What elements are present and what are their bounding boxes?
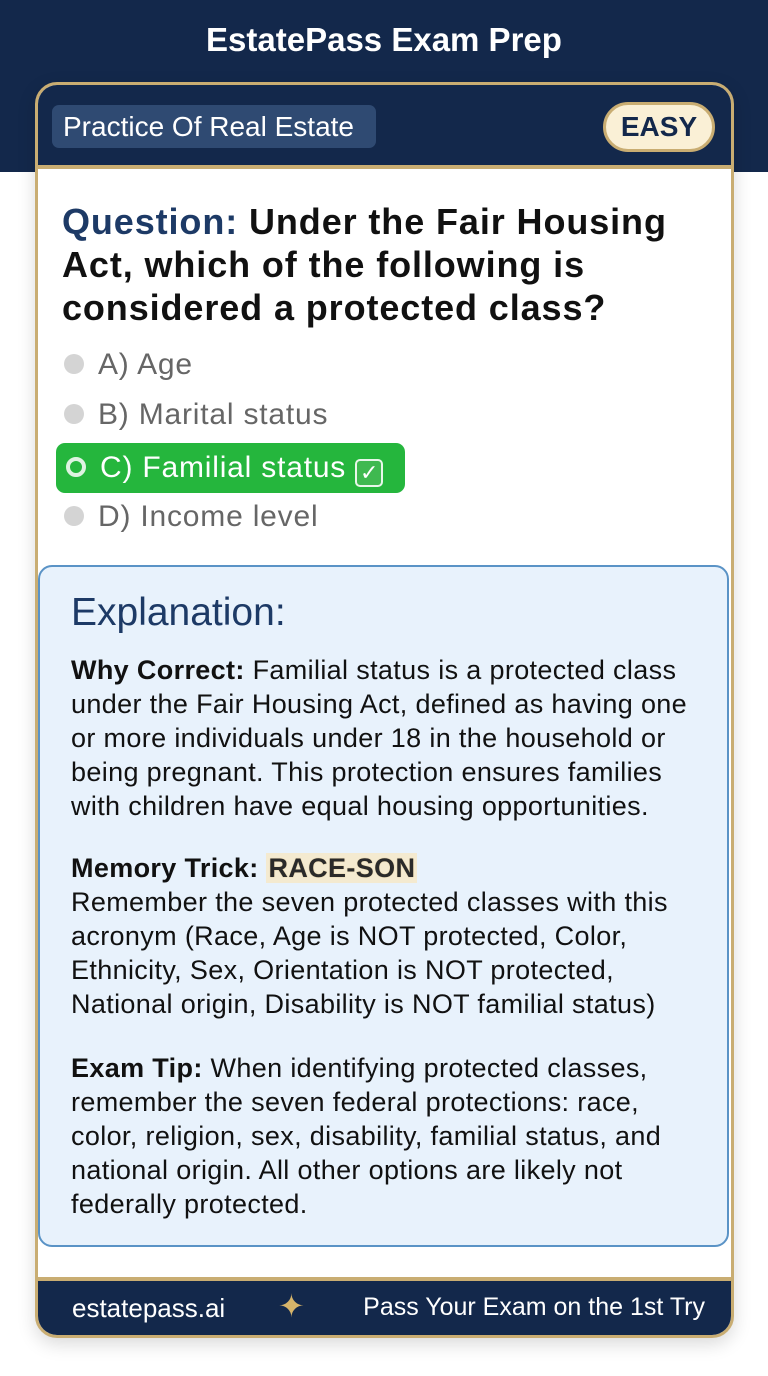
option D: D) Income level (98, 500, 318, 533)
card header (38, 85, 731, 169)
exam tip: color, religion, sex, disability, familial status, and (71, 1121, 661, 1151)
explanation heading: Explanation: (71, 591, 286, 634)
why correct: being pregnant. This protection ensures families (71, 757, 662, 787)
why correct: or more individuals under 18 in the household or (71, 723, 666, 753)
exam tip: federally protected. (71, 1189, 308, 1219)
option C correct: C) Familial status (100, 451, 346, 484)
memory trick: Memory Trick: RACE-SON (71, 853, 415, 883)
question (62, 201, 667, 328)
question: Question: Under the Fair Housing (62, 201, 667, 242)
difficulty badge: EASY (621, 111, 697, 142)
footer url: estatepass.ai (72, 1293, 225, 1323)
option C correct: ✓ (360, 460, 378, 485)
question: Act, which of the following is (62, 244, 585, 285)
option B: B) Marital status (98, 398, 328, 431)
why correct (71, 655, 687, 821)
explanation panel (38, 565, 729, 1247)
difficulty badge (603, 102, 715, 152)
option A: A) Age (98, 348, 193, 381)
question: considered a protected class? (62, 287, 606, 328)
exam tip: national origin. All other options are likely not (71, 1155, 622, 1185)
why correct: with children have equal housing opportunities. (71, 791, 649, 821)
category badge: Practice Of Real Estate (63, 111, 354, 142)
memory trick: acronym (Race, Age is NOT protected, Color, (71, 921, 627, 951)
title: EstatePass Exam Prep (206, 21, 562, 58)
exam tip: Exam Tip: When identifying protected classes, (71, 1053, 648, 1083)
memory trick: National origin, Disability is NOT familial status) (71, 989, 656, 1019)
header band (0, 0, 768, 172)
memory trick (71, 853, 668, 1019)
exam tip (71, 1053, 661, 1219)
option C correct (56, 443, 405, 493)
memory trick: Ethnicity, Sex, Orientation is NOT protected, (71, 955, 614, 985)
why correct: Why Correct: Familial status is a protected class (71, 655, 676, 685)
exam tip: remember the seven federal protections: race, (71, 1087, 639, 1117)
why correct: under the Fair Housing Act, defined as having one (71, 689, 687, 719)
icon: sparkle: ✦ (278, 1288, 305, 1324)
memory trick: Remember the seven protected classes with this (71, 887, 668, 917)
footer (38, 1277, 731, 1335)
category badge (52, 105, 376, 148)
footer slogan: Pass Your Exam on the 1st Try (363, 1293, 705, 1321)
